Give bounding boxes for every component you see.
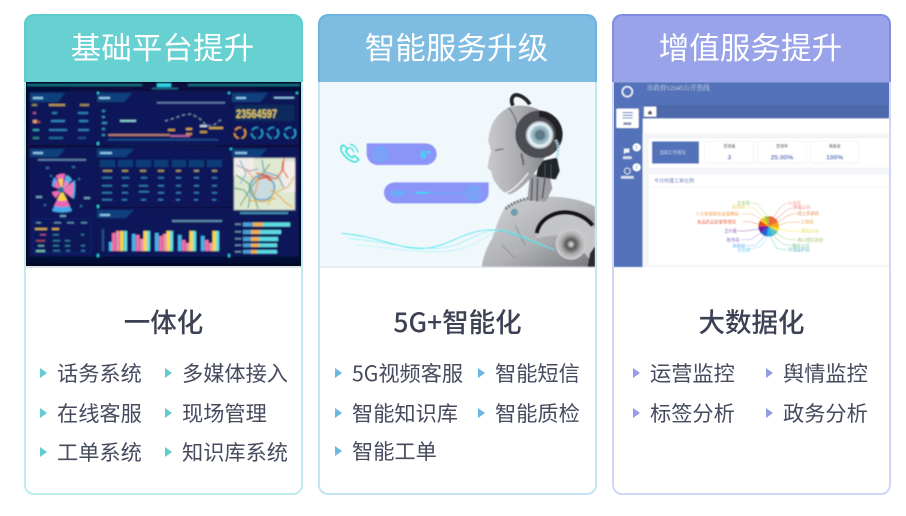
line chart xyxy=(157,102,225,104)
subheading: 5G+智能化: 5G+智能化 xyxy=(393,301,522,340)
hotline system screenshot: 受理量 xyxy=(723,143,735,149)
stacked bars xyxy=(243,222,290,254)
headset xyxy=(512,95,530,106)
hotline system screenshot: 供电公司 xyxy=(793,204,810,211)
hotline system screenshot: 当前工作情况 xyxy=(660,149,686,156)
table xyxy=(100,160,222,167)
feature list: 5G+智能化: 5G视频客服 xyxy=(352,357,463,388)
hotline system screenshot: 文化局 xyxy=(737,199,750,206)
hotline system screenshot: 水利局 xyxy=(732,242,745,249)
panel: 增值服务提升 xyxy=(612,14,891,495)
feature list: 大数据化: 舆情监控 xyxy=(783,357,868,388)
feature list: 5G+智能化: 智能工单 xyxy=(352,435,437,466)
hotline system screenshot: 环境保护局 xyxy=(788,246,810,253)
neck xyxy=(527,173,552,202)
heading: 增值服务提升 xyxy=(612,14,891,82)
robot customer-service illustration: 0:29 xyxy=(391,191,405,198)
feature list: 大数据化 xyxy=(633,357,868,428)
hotline system screenshot: 南山辖区政府 xyxy=(797,236,824,243)
feature list: 一体化 xyxy=(40,357,288,467)
feature list: 一体化: 工单系统 xyxy=(57,436,142,467)
hotline system screenshot: 满意度 xyxy=(829,143,841,149)
subheading: 一体化: 一体化 xyxy=(124,301,203,340)
hotline system screenshot: 卫计委 xyxy=(724,228,738,235)
hotline system screenshot: 人力资源和社会保障局 xyxy=(695,210,739,217)
hotline system screenshot: 食品药品监督管理局 xyxy=(697,218,736,225)
feature list: 一体化: 现场管理 xyxy=(182,397,267,428)
heading: 基础平台提升: 基础平台提升 xyxy=(71,24,254,68)
hotline system screenshot: 工商局 xyxy=(801,218,814,225)
head xyxy=(488,106,554,194)
hotline system screenshot: 公会局 xyxy=(788,199,801,206)
bar chart xyxy=(172,220,222,222)
hotline system screenshot: 税务局 xyxy=(727,236,740,243)
map xyxy=(234,158,295,210)
robot customer-service illustration xyxy=(320,82,595,268)
rose chart xyxy=(52,190,72,212)
hotline system screenshot: 测试1029 xyxy=(801,228,820,235)
hotline system screenshot: 市政府12345公开热线 xyxy=(647,83,710,92)
feature list: 一体化: 在线客服 xyxy=(57,397,142,428)
hotline system screenshot: 粮农公司 xyxy=(792,242,810,249)
shoulder xyxy=(537,212,595,266)
dashboard screenshot xyxy=(26,82,301,268)
feature list: 5G+智能化: 智能短信 xyxy=(495,357,580,388)
phone icon xyxy=(341,145,359,162)
heading: 智能服务升级 xyxy=(318,14,597,82)
hotline system screenshot: 受理率 xyxy=(776,143,788,149)
hotline system screenshot: 国土资源局 xyxy=(797,210,819,217)
hotline system screenshot: 3 xyxy=(727,155,731,162)
hotline system screenshot xyxy=(614,82,889,268)
feature list: 一体化: 知识库系统 xyxy=(182,436,288,467)
robot torso xyxy=(482,197,595,267)
waves xyxy=(342,230,555,252)
feature list: 5G+智能化: 智能知识库 xyxy=(352,397,458,428)
heading: 智能服务升级: 智能服务升级 xyxy=(365,24,548,68)
hotline system screenshot: 今日何理工单比例 xyxy=(654,177,694,184)
dashboard screenshot: 23564597 xyxy=(236,109,277,121)
counter xyxy=(235,105,294,121)
panel: 智能服务升级 xyxy=(318,14,597,495)
heading: 增值服务提升: 增值服务提升 xyxy=(659,24,842,68)
feature list: 一体化: 话务系统 xyxy=(57,357,142,388)
feature list: 5G+智能化 xyxy=(335,357,580,466)
subheading: 大数据化: 大数据化 xyxy=(698,301,804,340)
hotline system screenshot: 100% xyxy=(826,155,843,162)
hotline system screenshot: 农业局 xyxy=(737,246,750,253)
chat bubbles xyxy=(367,143,437,165)
feature list: 大数据化: 标签分析 xyxy=(650,397,735,428)
feature list: 大数据化: 运营监控 xyxy=(650,357,735,388)
feature list: 5G+智能化: 智能质检 xyxy=(495,397,580,428)
hotline system screenshot: 民政局 xyxy=(732,204,745,211)
feature list: 一体化: 多媒体接入 xyxy=(182,357,288,388)
feature list: 大数据化: 政务分析 xyxy=(783,397,868,428)
small labels xyxy=(33,97,294,216)
robot customer-service illustration: 6" xyxy=(420,150,431,162)
heading: 基础平台提升 xyxy=(24,14,303,82)
pie chart xyxy=(758,216,779,237)
panel: 基础平台提升 xyxy=(24,14,303,495)
hotline system screenshot: 25.00% xyxy=(771,155,793,162)
